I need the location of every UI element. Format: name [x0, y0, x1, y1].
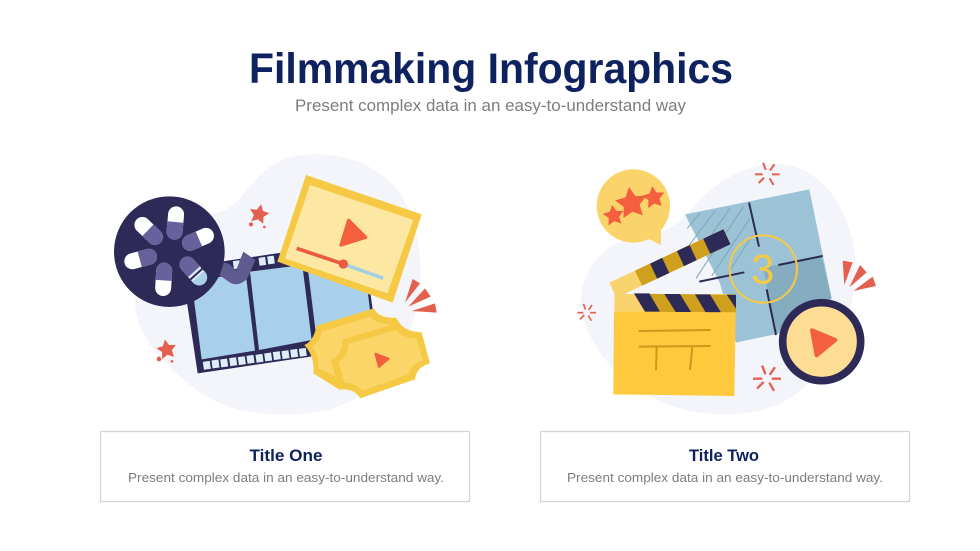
countdown number: 3	[751, 245, 774, 292]
film reel	[114, 196, 225, 307]
illustration: clapperboard, storyboard, rating bubble and play button	[577, 163, 876, 414]
sparkle: bottom	[753, 366, 781, 391]
video player	[277, 175, 422, 303]
hatching	[687, 207, 753, 278]
progress bar	[343, 264, 383, 278]
illustration: film reel, film strip, video player and tickets	[114, 154, 437, 414]
background blob	[135, 154, 421, 414]
burst wedges	[405, 279, 437, 313]
speech bubble with stars	[597, 169, 670, 245]
panel border	[540, 432, 910, 502]
panel text: Present complex data in an easy-to-understand way.	[567, 470, 883, 485]
crosshair	[699, 203, 823, 335]
star: lower	[155, 338, 178, 363]
sparkle: left	[577, 304, 596, 321]
play button	[341, 220, 366, 245]
panel: title two	[540, 432, 910, 502]
play button	[783, 303, 861, 381]
star: upper	[248, 202, 271, 228]
burst wedges	[843, 261, 876, 291]
clapper arm	[609, 229, 731, 298]
film ribbon	[219, 252, 255, 284]
background blob	[581, 164, 855, 414]
countdown circle	[730, 235, 797, 303]
panel border	[100, 432, 470, 502]
panel heading: Title Two	[689, 446, 759, 465]
tickets	[304, 308, 430, 398]
sparkle: top	[755, 163, 780, 185]
reel capsules	[122, 206, 216, 296]
clapper body	[613, 312, 736, 396]
title: Filmmaking Infographics	[249, 45, 733, 93]
panel heading: Title One	[250, 446, 322, 465]
clapperboard	[609, 229, 736, 396]
clapper top strip	[614, 294, 736, 312]
film strip	[182, 241, 378, 373]
panel: title one	[100, 432, 470, 502]
subtitle: Present complex data in an easy-to-understand way	[295, 97, 687, 115]
panel text: Present complex data in an easy-to-understand way.	[128, 470, 444, 485]
film countdown poster	[685, 189, 832, 343]
